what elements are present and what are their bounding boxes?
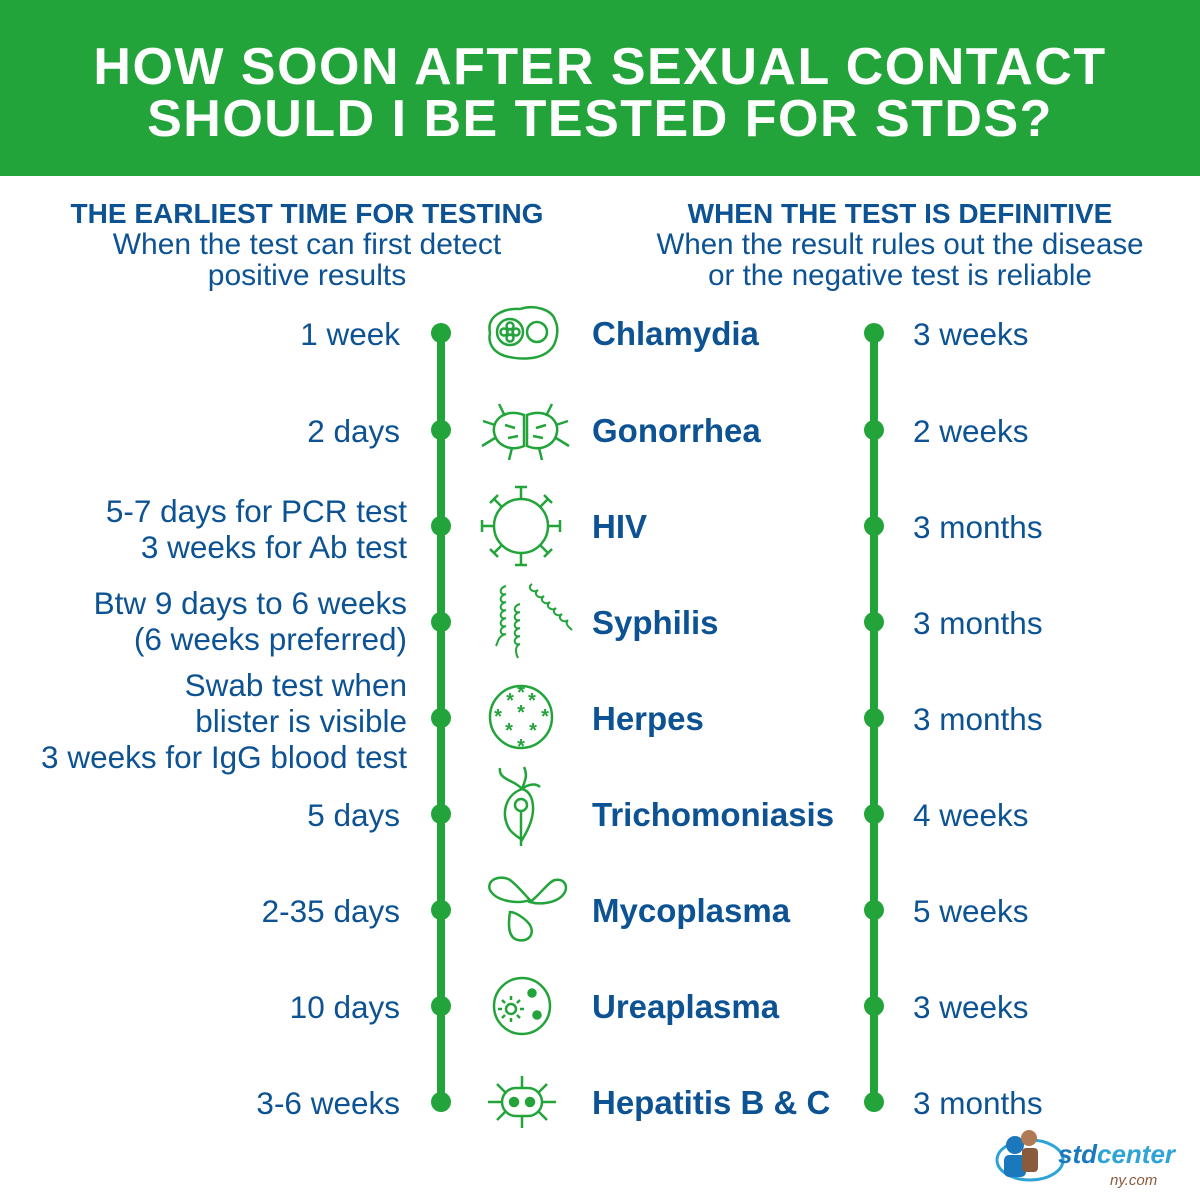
definitive times: 3 months xyxy=(913,701,1043,737)
icon: gonorrhea xyxy=(482,404,569,460)
icon: herpes: * xyxy=(517,702,525,724)
definitive times: 4 weeks xyxy=(913,797,1029,833)
title: HOW SOON AFTER SEXUAL CONTACT xyxy=(93,38,1107,96)
icon: herpes: * xyxy=(505,720,513,742)
icon: syphilis xyxy=(496,584,572,658)
earliest times: Swab test when xyxy=(185,667,407,703)
earliest times: 5-7 days for PCR test xyxy=(106,493,407,529)
icon: herpes: * xyxy=(541,706,549,728)
disease names: Syphilis xyxy=(592,604,719,641)
definitive times: 3 months xyxy=(913,1085,1043,1121)
logo: stdcenter ny.com xyxy=(997,1130,1177,1189)
earliest times xyxy=(41,316,407,1121)
disease names: Herpes xyxy=(592,700,704,737)
earliest times: blister is visible xyxy=(195,703,407,739)
logo: stdcenter ny.com: stdcenter xyxy=(1058,1139,1177,1169)
icon: herpes xyxy=(490,682,552,758)
right column heading: When the result rules out the disease xyxy=(656,228,1144,261)
definitive times: 3 weeks xyxy=(913,316,1029,352)
disease names xyxy=(592,315,834,1121)
icon: herpes: * xyxy=(517,736,525,758)
left timeline xyxy=(431,323,451,1112)
disease names: Hepatitis B & C xyxy=(592,1084,830,1121)
earliest times: Btw 9 days to 6 weeks xyxy=(94,585,407,621)
definitive times: 3 months xyxy=(913,509,1043,545)
right column heading: WHEN THE TEST IS DEFINITIVE xyxy=(688,198,1112,229)
disease names: Ureaplasma xyxy=(592,988,780,1025)
icon: herpes: * xyxy=(517,682,525,704)
title xyxy=(93,38,1107,148)
right column heading xyxy=(656,198,1144,292)
icon: trichomoniasis xyxy=(500,767,540,846)
icon: herpes: * xyxy=(528,690,536,712)
earliest times: 3-6 weeks xyxy=(256,1085,400,1121)
definitive times: 5 weeks xyxy=(913,893,1029,929)
logo: stdcenter ny.com: ny.com xyxy=(1110,1172,1157,1189)
earliest times: 2 days xyxy=(307,413,400,449)
definitive times: 3 months xyxy=(913,605,1043,641)
left column heading: When the test can first detect xyxy=(113,228,502,261)
earliest times: 2-35 days xyxy=(262,893,400,929)
disease names: Gonorrhea xyxy=(592,412,761,449)
icon: hepatitis xyxy=(488,1076,556,1128)
disease names: Mycoplasma xyxy=(592,892,791,929)
earliest times: 1 week xyxy=(300,316,400,352)
earliest times: 10 days xyxy=(290,989,400,1025)
disease names: Chlamydia xyxy=(592,315,760,352)
icon: herpes: * xyxy=(529,720,537,742)
icon: HIV xyxy=(482,487,560,565)
right timeline xyxy=(864,323,884,1112)
definitive times: 2 weeks xyxy=(913,413,1029,449)
header banner xyxy=(0,0,1200,176)
earliest times: (6 weeks preferred) xyxy=(134,621,407,657)
disease names: Trichomoniasis xyxy=(592,796,834,833)
left column heading: positive results xyxy=(208,259,406,292)
left column heading xyxy=(71,198,543,292)
earliest times: 3 weeks for Ab test xyxy=(141,529,407,565)
definitive times: 3 weeks xyxy=(913,989,1029,1025)
earliest times: 5 days xyxy=(307,797,400,833)
icon: herpes: * xyxy=(494,706,502,728)
right column heading: or the negative test is reliable xyxy=(708,259,1092,292)
disease names: HIV xyxy=(592,508,647,545)
definitive times xyxy=(913,316,1043,1121)
left column heading: THE EARLIEST TIME FOR TESTING xyxy=(71,198,543,229)
icon: herpes: * xyxy=(506,690,514,712)
icon: ureaplasma xyxy=(494,978,550,1034)
earliest times: 3 weeks for IgG blood test xyxy=(41,739,407,775)
icon: chlamydia xyxy=(489,307,557,358)
title: SHOULD I BE TESTED FOR STDS? xyxy=(147,90,1053,148)
icon: mycoplasma xyxy=(489,878,566,940)
